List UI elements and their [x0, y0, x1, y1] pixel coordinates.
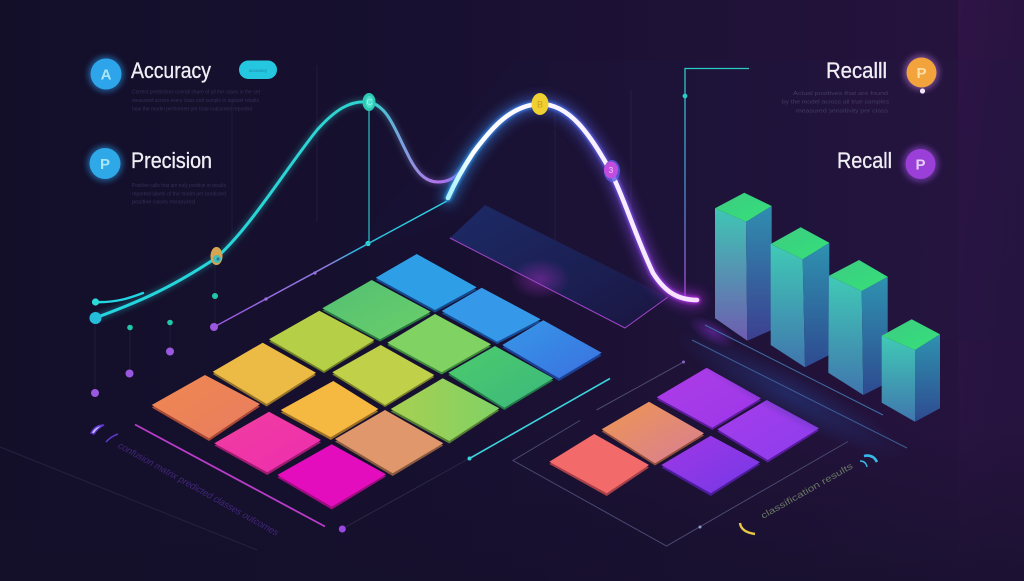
axis label: large grid: confusion matrix predicted classes outcomes	[115, 441, 281, 538]
line: cyan axis beside large grid	[468, 378, 610, 460]
marker: yellow node on second peak	[532, 93, 548, 115]
text block: precision description: positive cases measured	[132, 200, 195, 206]
heading: Recall with icon: P	[915, 156, 926, 174]
badge pill	[239, 60, 277, 79]
text block: accuracy description: Correct predictions overall share of all the cases in the set	[132, 90, 261, 96]
badge pill: accuracy	[249, 68, 268, 73]
line: vertical marker at first peak	[365, 102, 371, 246]
text block: accuracy description	[132, 90, 261, 112]
heading: Recalll with icon	[826, 54, 940, 94]
heading: Precision with icon: P	[100, 156, 110, 173]
chart line: glowing white curve	[448, 104, 697, 300]
cell: blue middle	[442, 288, 541, 344]
cell: peach	[335, 410, 443, 476]
cell: lime C	[391, 378, 499, 444]
cell: green A	[322, 280, 431, 342]
heading: Accuracy with icon: Accuracy	[131, 58, 211, 83]
text block: precision description: reported labels of the model per predicted	[132, 192, 226, 198]
cell: magenta	[277, 444, 386, 510]
data points: teal and purple dots	[91, 293, 218, 397]
cell: green C	[448, 346, 553, 410]
bar 4	[882, 319, 940, 422]
isometric frame: small grid outline	[513, 360, 848, 546]
text block: recall description	[782, 91, 890, 114]
cell: orange	[602, 402, 704, 466]
bar 2	[771, 227, 829, 367]
marker: yellow node on second peak: B	[537, 100, 543, 110]
heading: Recalll with icon: Recalll	[826, 58, 887, 83]
marker: teal node on first peak: C	[367, 98, 373, 107]
text block: accuracy description: how the model performed per total outcomes reported	[132, 106, 252, 112]
heading: Accuracy with icon: A	[101, 66, 112, 84]
cell: blue top	[376, 254, 477, 312]
bar chart: isometric bars	[715, 193, 940, 422]
heatmap grid: large confusion matrix	[152, 254, 602, 510]
cell: coral	[549, 434, 649, 496]
heading: Recall with icon	[837, 146, 938, 182]
cell: green B	[387, 314, 491, 374]
cell: pink	[214, 412, 321, 475]
marker: teal node on first peak	[362, 93, 376, 111]
marker: orange node on cyan curve	[210, 247, 222, 265]
text block: precision description: Positive calls that are truly positive in results	[132, 183, 226, 189]
floor band beneath bars	[664, 310, 916, 477]
heading: Accuracy with icon	[88, 56, 211, 92]
heading: Precision with icon	[87, 146, 212, 182]
cell: purple right	[717, 400, 819, 462]
cell: lime B	[332, 345, 434, 407]
chart line: cyan curve	[90, 102, 462, 324]
text block: precision description	[132, 183, 226, 206]
axis label: small grid	[740, 456, 877, 534]
marker: purple node on descending curve: 3	[609, 166, 614, 175]
line: baseline from axis to second curve	[214, 201, 447, 327]
heading: Recall with icon: Recall	[837, 148, 892, 173]
text block: recall description: measured sensitivity per class	[796, 108, 889, 114]
heatmap grid: small matrix	[549, 368, 819, 496]
cell: yellow B	[281, 381, 378, 440]
cell: orange	[152, 375, 260, 441]
panel: shaded plane under curve	[450, 205, 668, 328]
heading: Recalll with icon: P	[916, 65, 927, 82]
cell: purple top	[657, 368, 761, 430]
marker: purple node on descending curve	[604, 160, 620, 182]
text block: recall description: Actual positives that are found	[793, 91, 888, 97]
line: vertical bracket right of curve	[683, 68, 749, 298]
cell: yellow A	[213, 343, 316, 406]
cell: lime A	[269, 311, 374, 373]
text block: accuracy description: measured across every class and sample in dataset results	[132, 98, 259, 104]
cell: purple bottom	[661, 436, 760, 496]
text block: recall description: by the model across all true samples	[782, 100, 890, 106]
bar 3	[828, 260, 888, 395]
heading: Precision with icon: Precision	[131, 148, 212, 173]
cell: blue right	[502, 320, 602, 381]
axis label: small grid: classification results	[759, 461, 855, 521]
line: magenta axis under large grid	[135, 424, 346, 532]
bar 1	[715, 193, 772, 341]
